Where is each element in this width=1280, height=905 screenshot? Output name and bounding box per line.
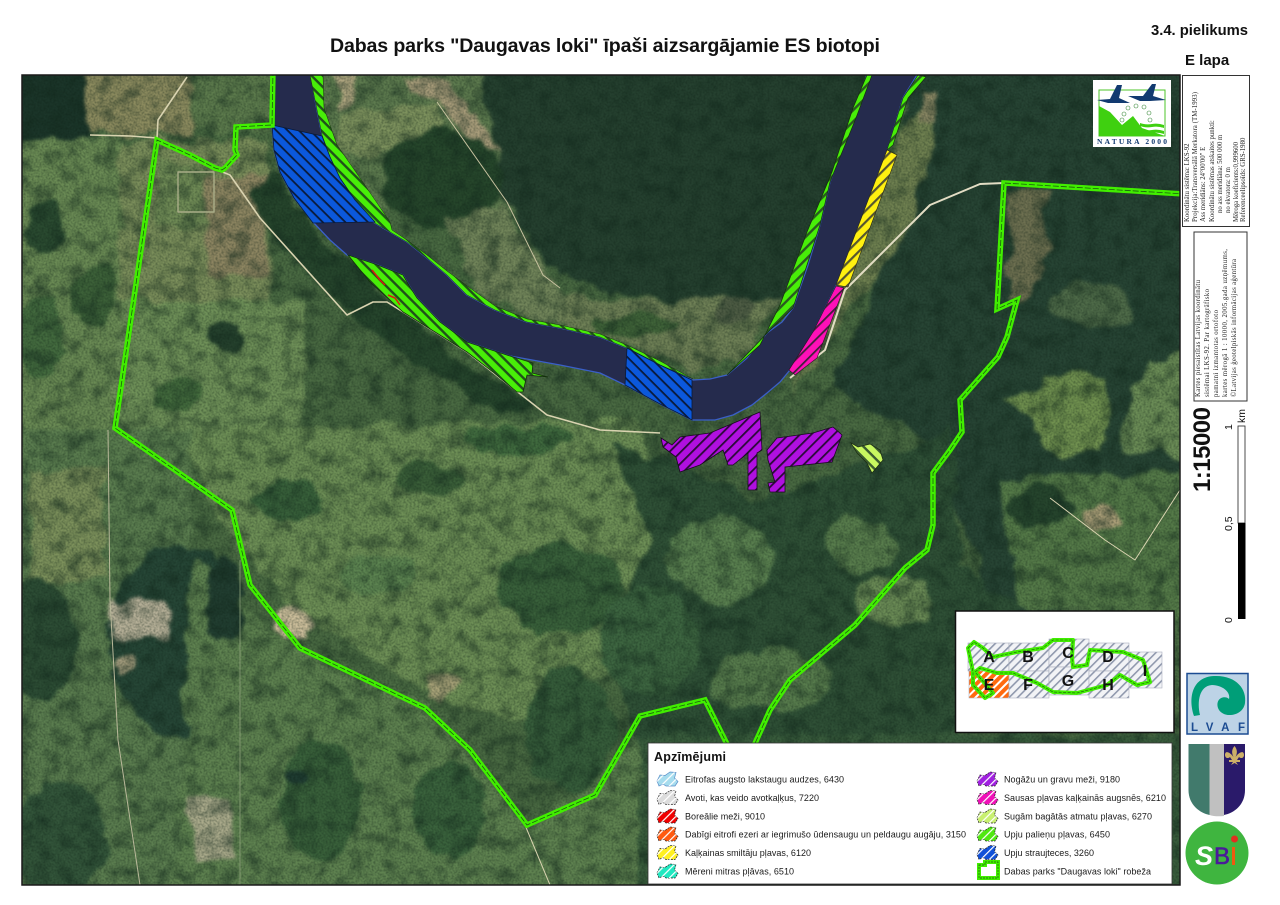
logo: SBI: B	[1214, 843, 1230, 870]
coordinate system box: Koordinātu sistēma: LKS-92	[1184, 143, 1191, 222]
map source box	[1194, 232, 1247, 401]
habitat: slope forest east	[767, 427, 842, 492]
scale bar: 0,5	[1223, 516, 1235, 531]
legend panel	[648, 743, 1172, 884]
habitat: lower floodplain meadow	[348, 255, 548, 392]
habitat: calcareous sand grassland	[836, 150, 897, 287]
habitat: dry calcareous meadow	[789, 286, 844, 375]
sheet letters: I	[1143, 663, 1147, 680]
map source box: Kartes piesaistītas Latvijas koordinātu	[1195, 279, 1202, 397]
coordinate system box	[1182, 76, 1250, 226]
sheet letters: F	[1023, 677, 1033, 694]
logo: Natura 2000: NATURA 2000	[1097, 137, 1167, 146]
legend heading: Apzīmējumi	[654, 750, 726, 764]
sheet letters: A	[983, 649, 995, 666]
legend left column: Dabīgi eitrofi ezeri ar iegrimušo ūdensaugu un peldaugu augāju, 3150	[685, 830, 966, 840]
map source box: ©Latvijas ģeotelpiskās informācijas aģentūra	[1230, 259, 1238, 397]
logo: SBI	[1186, 822, 1248, 884]
logo: LVAF	[1187, 674, 1248, 734]
map source box: sistēmai LKS-92. Par kartogrāfisko	[1204, 288, 1211, 397]
page title: Dabas parks "Daugavas loki" īpaši aizsargājamie ES biotopi	[330, 35, 880, 57]
sheet letters: H	[1102, 677, 1114, 694]
map source box: kartes mērogā 1 : 10000, 2005.gada uzņēmums,	[1222, 249, 1229, 397]
map source box: pamatni izmantotas ortofoto	[1213, 309, 1220, 397]
legend right column: Sausas pļavas kaļķainās augsnēs, 6210	[1004, 793, 1166, 803]
coordinate system box: Projekcija:Transversālā Merkatora (TM-1993)	[1192, 92, 1199, 222]
habitat: river rapids downstream	[625, 348, 692, 420]
sheet letters: C	[1062, 645, 1074, 662]
legend right column: Nogāžu un gravu meži, 9180	[1004, 774, 1120, 784]
habitat: upper left floodplain meadow strip	[310, 75, 693, 379]
legend left column: Eitrofas augsto lakstaugu audzes, 6430	[685, 774, 844, 784]
habitat: right bank floodplain meadow	[727, 75, 872, 375]
legend left column: Mēreni mitras pļāvas, 6510	[685, 866, 794, 876]
habitat: river rapids upstream	[272, 125, 375, 223]
habitat: species rich meadow	[851, 443, 883, 473]
coordinate system box: Koordinātu sistēmas atskaites punkti:	[1209, 120, 1216, 222]
sheet letters: G	[1062, 673, 1074, 690]
sheet letters: E	[984, 677, 995, 694]
coordinate system box: Referenceelipsoīds: GRS-1980	[1240, 137, 1247, 222]
map scale ratio: 1:15000	[1189, 407, 1216, 492]
sheet letters	[983, 645, 1147, 694]
coordinate system box: no ekvatora: 0 m	[1225, 166, 1232, 213]
roads	[90, 77, 1180, 885]
legend right column	[977, 772, 1166, 878]
habitat: boreal forest fragments	[372, 270, 400, 305]
legend left column: Boreālie meži, 9010	[685, 812, 765, 822]
habitat: slope forest west	[661, 412, 762, 490]
inset key map	[956, 611, 1174, 732]
scale bar: 1	[1223, 424, 1235, 430]
legend right column: Upju straujteces, 3260	[1004, 848, 1094, 858]
logo: municipal coat of arms	[1188, 744, 1245, 816]
legend left column: Kaļķainas smiltāju pļavas, 6120	[685, 848, 811, 858]
sheet grid	[968, 639, 1162, 698]
coordinate system box: Mēroga koeficients:0,999600	[1233, 141, 1240, 222]
legend left column	[657, 772, 966, 878]
scale bar: km	[1236, 409, 1248, 423]
annex label: 3.4. pielikums	[1151, 23, 1248, 39]
river Daugava	[272, 70, 920, 420]
sheet letters: D	[1102, 649, 1114, 666]
logo: SBI: S	[1195, 841, 1213, 871]
scale bar: 0	[1223, 617, 1235, 623]
park outline on inset	[968, 640, 1150, 698]
logo: LVAF: LVAF	[1191, 722, 1245, 734]
habitat: upper right bank meadow	[887, 75, 926, 150]
sheet label: E lapa	[1185, 52, 1230, 69]
sheet letters: B	[1022, 649, 1034, 666]
logo: Natura 2000	[1093, 80, 1171, 147]
legend right column: Sugām bagātās atmatu pļavas, 6270	[1004, 812, 1152, 822]
coordinate system box: Ass meridiāns: 24°00'00" E	[1200, 147, 1207, 222]
coordinate system box: no ass meridiāna: 500 000 m	[1217, 134, 1224, 213]
scale bar	[1223, 409, 1248, 623]
nature park boundary	[115, 70, 1185, 825]
legend left column: Avoti, kas veido avotkaļķus, 7220	[685, 793, 819, 803]
legend right column: Dabas parks "Daugavas loki" robeža	[1004, 866, 1151, 876]
legend right column: Upju palieņu pļavas, 6450	[1004, 830, 1110, 840]
